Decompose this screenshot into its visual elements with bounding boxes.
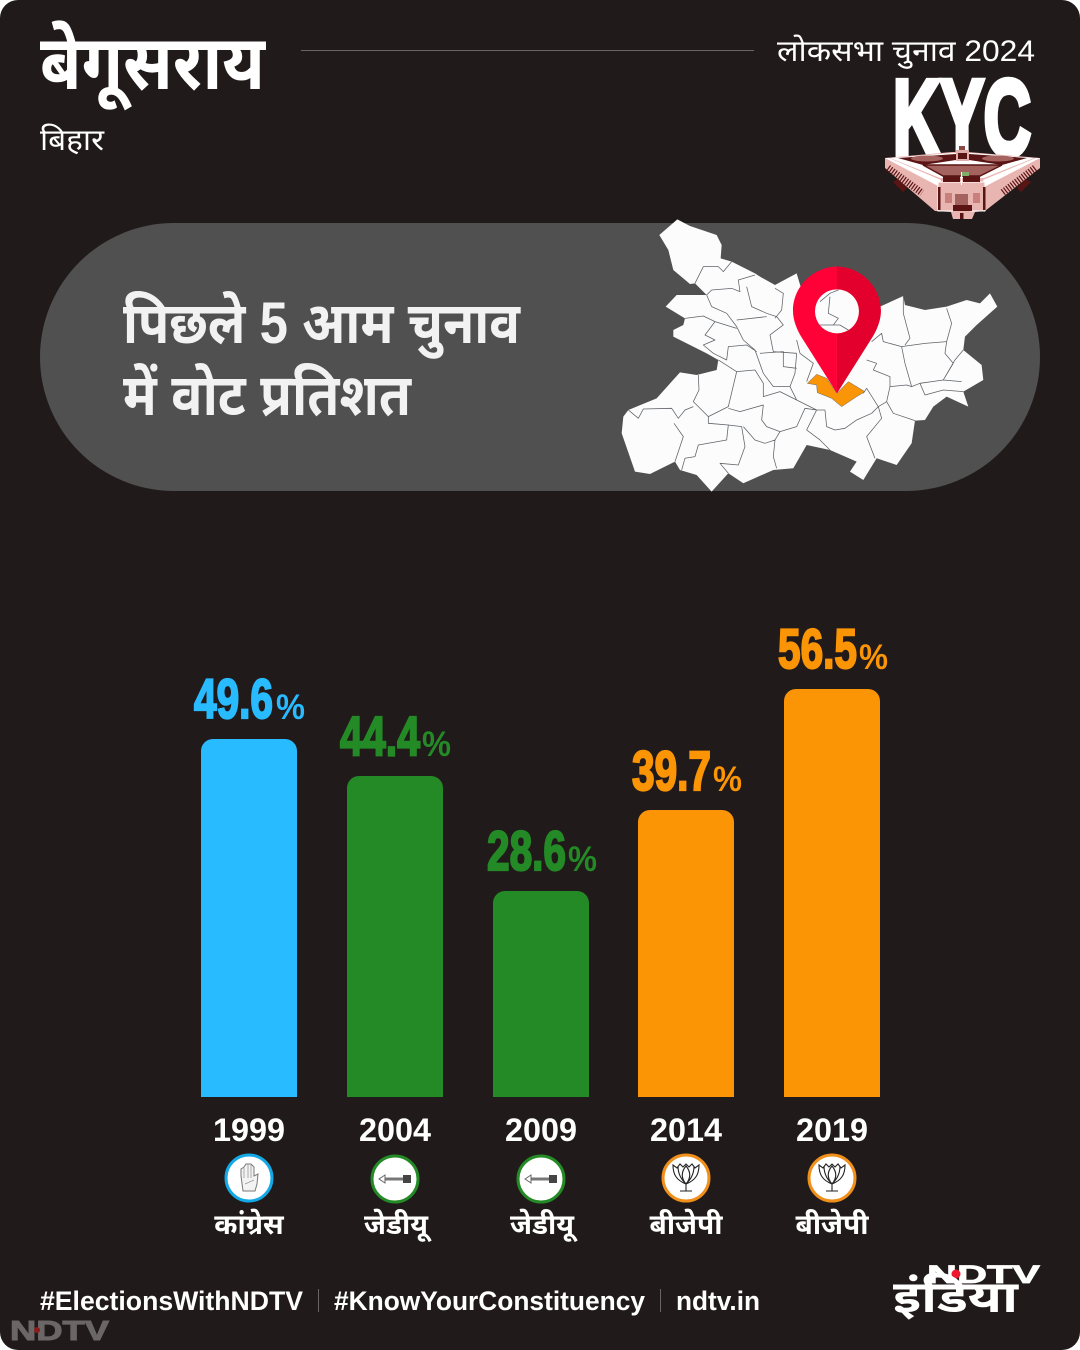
panel: section banner	[40, 219, 1040, 492]
banner heading	[123, 291, 521, 428]
bar: 2014: %	[713, 760, 742, 799]
bar: 2009: %	[568, 840, 597, 879]
bar: 1999: %	[276, 688, 305, 727]
title: बेगूसराय	[40, 21, 267, 110]
bar: 1999: 49.6	[194, 667, 273, 730]
year axis labels: 1999	[213, 1112, 285, 1148]
bar: 2019: 56.5	[778, 617, 857, 680]
highlighted district	[807, 374, 865, 407]
banner heading: में वोट प्रतिशत	[123, 363, 412, 428]
hashtag footer: ndtv.in	[676, 1286, 760, 1316]
bar: 1999	[194, 667, 305, 1097]
map: Bihar	[622, 219, 997, 492]
logo: NDTV India: NDTV	[927, 1261, 1041, 1289]
party labels: कांग्रेस	[214, 1207, 285, 1240]
logo: NDTV watermark: NDTV	[10, 1315, 109, 1346]
bar: 2014: 39.7	[632, 739, 711, 802]
year axis labels: 2004	[359, 1112, 431, 1148]
bar: 2019: %	[859, 638, 888, 677]
icon: location pin	[793, 267, 881, 393]
party labels: जेडीयू	[364, 1207, 432, 1242]
logo: NDTV India	[893, 1261, 1041, 1322]
party labels: जेडीयू	[510, 1207, 578, 1242]
bar: 2004: %	[422, 725, 451, 764]
icon: JDU arrow 2009	[518, 1156, 564, 1202]
year axis labels: 2009	[505, 1112, 577, 1148]
icon: JDU arrow 2004	[372, 1156, 418, 1202]
year axis labels: 2014	[650, 1112, 722, 1148]
KYC logo with parliament	[885, 57, 1040, 219]
bar: 2004: 44.4	[340, 704, 420, 768]
hashtag footer	[40, 1286, 760, 1316]
hashtag footer: #KnowYourConstituency	[334, 1286, 645, 1316]
logo: NDTV India: इंडिया	[893, 1272, 1019, 1322]
hashtag footer: #ElectionsWithNDTV	[40, 1286, 303, 1316]
party labels: बीजेपी	[795, 1207, 869, 1240]
bar: 2009	[487, 819, 597, 1097]
party labels: बीजेपी	[649, 1207, 723, 1240]
bar chart	[194, 617, 888, 1097]
header label: election: लोकसभा चुनाव 2024	[777, 34, 1035, 69]
bar: 2009: 28.6	[487, 819, 566, 882]
subtitle: state: बिहार	[40, 123, 105, 157]
bar: 2014	[632, 739, 742, 1097]
party labels	[214, 1207, 869, 1242]
icon: parliament	[885, 146, 1040, 219]
year axis labels: 2019	[796, 1112, 868, 1148]
bar: 2004	[340, 704, 451, 1097]
year axis labels	[213, 1112, 868, 1148]
icon: BJP lotus 2014	[663, 1155, 709, 1201]
banner heading: पिछले 5 आम चुनाव	[123, 291, 521, 359]
bar: 2019	[778, 617, 888, 1097]
icon: BJP lotus 2019	[809, 1155, 855, 1201]
icon: Congress hand	[226, 1155, 272, 1201]
